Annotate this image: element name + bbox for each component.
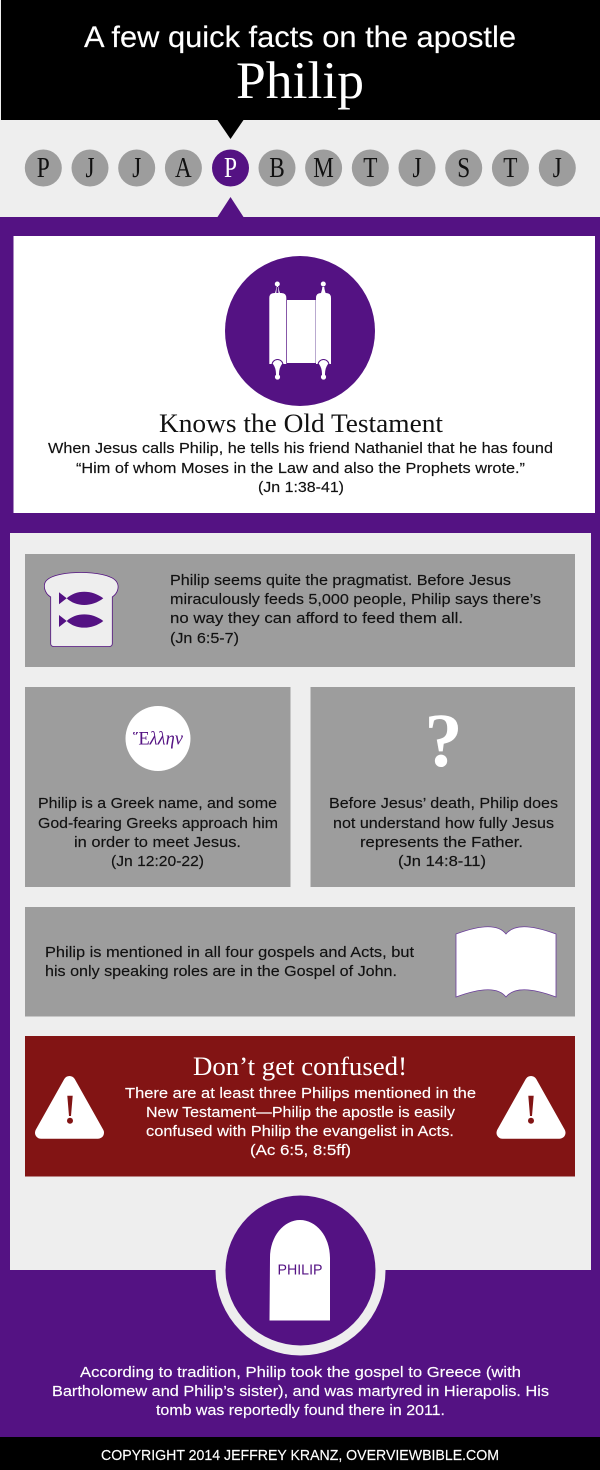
apostle selector row: M (313, 152, 334, 184)
text block: (Jn 12:20-22) (111, 853, 204, 870)
apostle selector row (25, 150, 576, 186)
text block: not understand how fully Jesus (333, 815, 554, 832)
icon: open book (456, 927, 556, 997)
text block (38, 795, 278, 870)
text block: tradition: According to tradition, Philip took the gospel to Greece (with (80, 1364, 521, 1381)
icon: tombstone: PHILIP (278, 1262, 322, 1278)
text block (125, 1085, 476, 1159)
title name: Philip (236, 52, 364, 110)
text block: tradition: Bartholomew and Philip’s sister), and was martyred in Hierapolis. His (52, 1383, 549, 1400)
panel: light facts section (10, 533, 591, 1270)
card: pragmatist (25, 554, 575, 667)
text block: Philip seems quite the pragmatist. Before Jesus (170, 572, 511, 589)
icon: question mark: ? (424, 699, 462, 783)
card: understanding the Father (310, 687, 575, 887)
footer: COPYRIGHT 2014 JEFFREY KRANZ, OVERVIEWBIBLE.COM (101, 1447, 499, 1464)
apostle selector row: T (363, 152, 378, 184)
text block (329, 795, 558, 870)
panel: knows the Old Testament (14, 236, 595, 513)
footer (0, 1437, 600, 1470)
text block: Philip is a Greek name, and some (38, 795, 277, 812)
text block: “Him of whom Moses in the Law and also the Prophets wrote.” (76, 460, 525, 477)
apostle selector row: A (175, 152, 192, 184)
title line: A few quick facts on the apostle (84, 21, 516, 54)
text block: no way they can afford to feed them all. (170, 610, 463, 627)
text block: Before Jesus’ death, Philip does (329, 795, 558, 812)
text block: tradition: tomb was reportedly found there in 2011. (156, 1402, 445, 1419)
text block: miraculously feeds 5,000 people, Philip says there’s (170, 591, 541, 608)
text block: There are at least three Philips mentioned in the (125, 1085, 476, 1102)
icon: bread with fish (44, 572, 118, 646)
apostle selector row: J (553, 152, 562, 184)
icon: torah scroll (225, 256, 375, 406)
icon: Greek word circle (126, 706, 190, 771)
text block: tradition (52, 1364, 549, 1419)
text block: his only speaking roles are in the Gospel of John. (45, 963, 397, 980)
icon: warning right (502, 1082, 560, 1133)
text block: (Jn 6:5-7) (170, 630, 239, 647)
apostle selector row: P (224, 152, 237, 184)
header banner (1, 0, 600, 139)
text block: (Jn 1:38-41) (258, 479, 344, 496)
text block: (Jn 14:8-11) (398, 853, 486, 870)
apostle selector row: T (503, 152, 518, 184)
icon: tombstone (216, 1186, 386, 1356)
apostle selector row: J (86, 152, 94, 184)
heading: Knows the Old Testament (159, 409, 444, 438)
text block: represents the Father. (360, 834, 523, 851)
text block: When Jesus calls Philip, he tells his friend Nathaniel that he has found (48, 440, 553, 457)
text block (45, 944, 415, 980)
icon: Greek word circle: Ἕλλην (133, 728, 184, 750)
card: speaking roles (25, 907, 575, 1016)
text block: (Ac 6:5, 8:5ff) (250, 1142, 351, 1159)
apostle selector row: J (132, 152, 141, 184)
callout: don't get confused (25, 1036, 575, 1176)
apostle selector row: J (412, 152, 422, 184)
card: Greek name (25, 687, 290, 887)
text block: in order to meet Jesus. (74, 834, 241, 851)
heading: Don’t get confused! (193, 1052, 407, 1081)
text block (48, 440, 553, 496)
text block (170, 572, 541, 647)
apostle selector row: B (269, 152, 285, 184)
text block: God-fearing Greeks approach him (38, 815, 278, 832)
text block: confused with Philip the evangelist in Acts. (146, 1123, 454, 1140)
text block: Philip is mentioned in all four gospels and Acts, but (45, 944, 415, 961)
icon: warning left (41, 1082, 98, 1133)
text block: New Testament—Philip the apostle is easily (146, 1104, 456, 1121)
apostle selector row: P (37, 152, 50, 184)
apostle selector row: S (457, 152, 470, 184)
